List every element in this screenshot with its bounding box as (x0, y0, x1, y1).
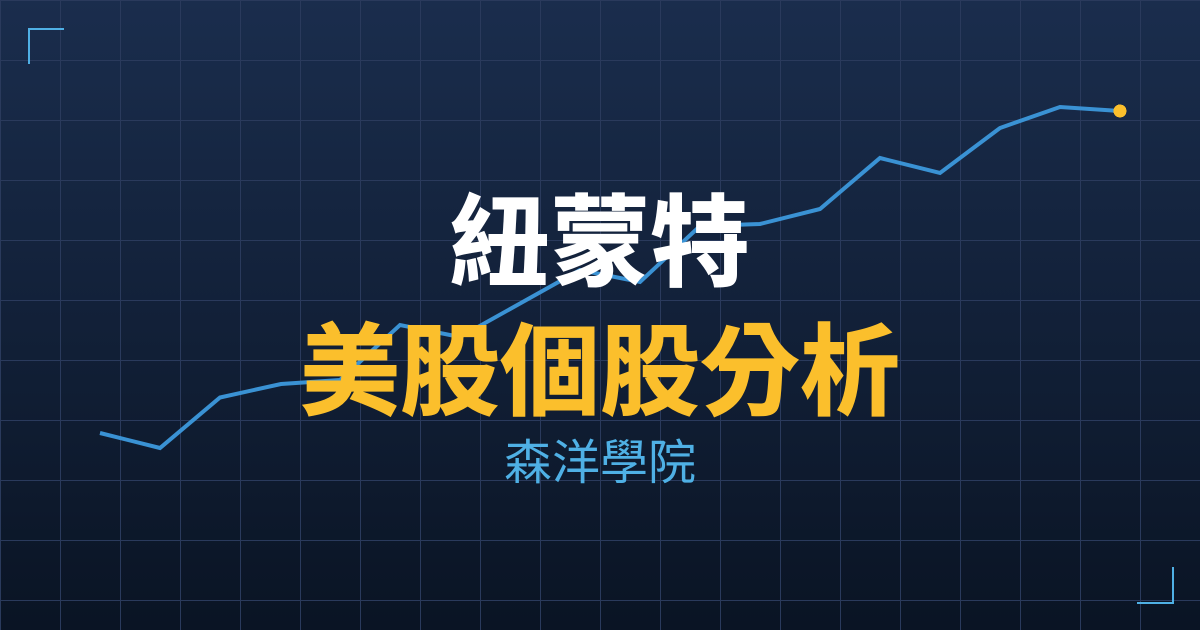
heading: analysis label: 美股個股分析 (300, 317, 900, 429)
title: company name: 紐蒙特 (450, 188, 750, 300)
corner bracket: top left (29, 29, 64, 64)
chart end point marker (1114, 104, 1126, 118)
line chart: rising price trend (100, 107, 1120, 448)
corner bracket: bottom right (1137, 567, 1173, 603)
brand name: 森洋學院 (504, 437, 696, 490)
